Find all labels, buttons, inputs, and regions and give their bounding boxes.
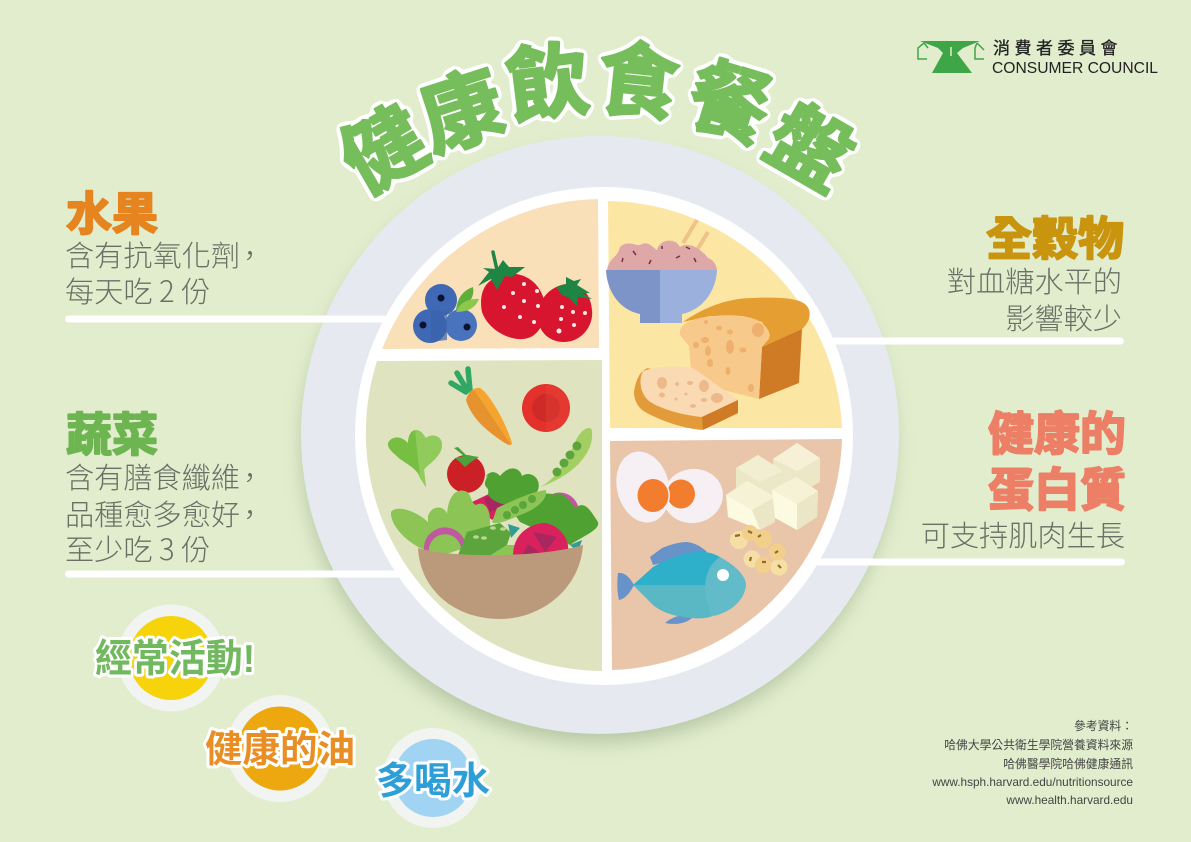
title: 健 <box>326 91 443 211</box>
references: www.hsph.harvard.edu/nutritionsource <box>931 775 1133 789</box>
references <box>931 719 1133 807</box>
title: 食 <box>592 34 683 133</box>
text block: vegetables: 蔬菜 <box>66 409 158 461</box>
badge: active <box>95 604 255 712</box>
text block: healthy protein: 蛋白質 <box>988 464 1126 516</box>
badge: active: 經常活動! <box>95 638 255 681</box>
icon: rice bowl <box>606 220 717 323</box>
badge: drink water <box>376 728 490 828</box>
icon: blueberries <box>413 284 479 343</box>
title: 盤 <box>751 89 868 209</box>
badge: healthy oil: 健康的油 <box>205 728 355 770</box>
text block: vegetables: 品種愈多愈好， <box>65 499 264 532</box>
icon: scales <box>918 41 984 73</box>
text block: healthy protein <box>921 408 1126 553</box>
leader line: whole grains <box>832 338 1124 344</box>
leader line: fruit <box>65 316 387 322</box>
panel: protein <box>609 439 842 670</box>
icon: tofu cubes <box>726 443 820 530</box>
icon: pea pod <box>540 428 592 487</box>
references: 哈佛大學公共衛生學院營養資料來源 <box>944 738 1133 752</box>
text block: vegetables: 至少吃 3 份 <box>65 527 210 569</box>
badge: drink water: 多喝水 <box>376 761 490 803</box>
icon: soybeans <box>730 525 788 576</box>
icon: cherry tomato <box>447 447 485 493</box>
text block: fruit: 每天吃 2 份 <box>65 269 210 311</box>
text block: healthy protein: 健康的 <box>988 408 1126 460</box>
logo: Consumer Council <box>918 39 1158 77</box>
panel: fruit <box>382 199 599 349</box>
icon: salad bowl <box>391 468 598 619</box>
icon: carrot <box>451 369 512 445</box>
panel: whole grains <box>606 201 842 430</box>
references: 哈佛醫學院哈佛健康通訊 <box>1003 757 1133 771</box>
text block: vegetables <box>65 409 264 569</box>
badge: healthy oil <box>205 695 355 802</box>
references: 參考資料： <box>1074 719 1133 733</box>
text block: whole grains: 全穀物 <box>986 213 1124 265</box>
icon: floating leaf <box>388 430 442 487</box>
logo: Consumer Council: CONSUMER COUNCIL <box>992 60 1158 77</box>
leader line: vegetables <box>65 570 410 578</box>
panel: vegetables <box>366 360 602 671</box>
icon: tomato slice <box>522 384 570 432</box>
text block: whole grains <box>947 213 1124 336</box>
icon: bread <box>634 298 810 430</box>
text block: healthy protein: 可支持肌肉生長 <box>921 520 1125 553</box>
references: www.health.harvard.edu <box>1005 793 1133 807</box>
icon: fish <box>617 542 746 624</box>
text block: fruit: 含有抗氧化劑， <box>65 240 264 273</box>
title <box>326 34 868 211</box>
icon: strawberries <box>478 252 592 342</box>
title: 餐 <box>676 49 781 160</box>
text block: fruit: 水果 <box>66 188 158 240</box>
logo: Consumer Council: 消費者委員會 <box>993 39 1122 58</box>
leader line: protein <box>812 558 1125 566</box>
text block: vegetables: 含有膳食纖維， <box>65 462 264 495</box>
title: 飲 <box>502 34 594 135</box>
text block: whole grains: 對血糖水平的 <box>947 266 1122 299</box>
title: 康 <box>409 57 516 169</box>
icon: boiled eggs <box>609 446 727 528</box>
text block: fruit <box>65 188 264 311</box>
text block: whole grains: 影響較少 <box>1005 303 1122 336</box>
plate <box>301 136 899 743</box>
